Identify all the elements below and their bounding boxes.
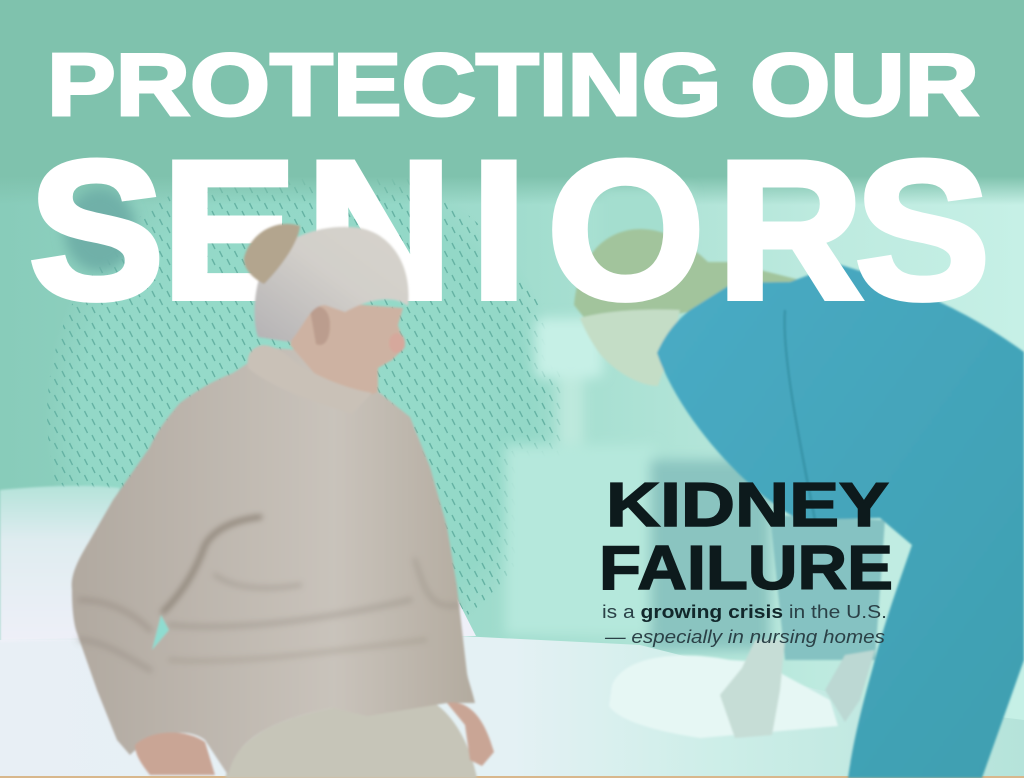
callout heading: FAILURE [599,534,893,603]
nurse hair [574,229,808,325]
callout subtext: is a growing crisis in the U.S. [602,602,887,622]
neck and face [290,300,405,398]
collar [247,345,372,414]
nurse face [580,309,680,386]
top teal band [0,0,1024,205]
senior woman [72,224,494,778]
hair bun [244,224,300,284]
hands [135,733,215,775]
callout: kidney failure [599,471,893,647]
nurse hand left [720,640,785,738]
title [29,35,990,340]
dotted circle pattern [43,153,567,677]
callout heading: KIDNEY [606,471,889,540]
title line 1: PROTECTING OUR [47,35,979,134]
nurse [574,229,1024,778]
sweater body [72,347,475,775]
nurse torso shadow [770,515,885,660]
callout subtext: — especially in nursing homes [604,627,885,647]
hair [255,227,409,342]
arm gap [152,615,169,650]
right pillow corner [450,585,476,636]
nose [389,333,405,353]
folded towels [609,655,838,738]
scrubs seam [785,310,815,520]
callout heading [599,471,893,603]
nurse hand right [825,650,875,722]
nurse scrubs [657,264,1024,778]
background furniture [64,188,770,650]
title line 2: SENIORS [29,121,990,340]
pillow [0,486,120,642]
callout subtext [602,602,887,647]
trousers [225,700,477,778]
ear [310,306,330,345]
orange bottom edge [0,776,1024,778]
sweater folds [80,517,458,670]
bed [0,486,1024,778]
